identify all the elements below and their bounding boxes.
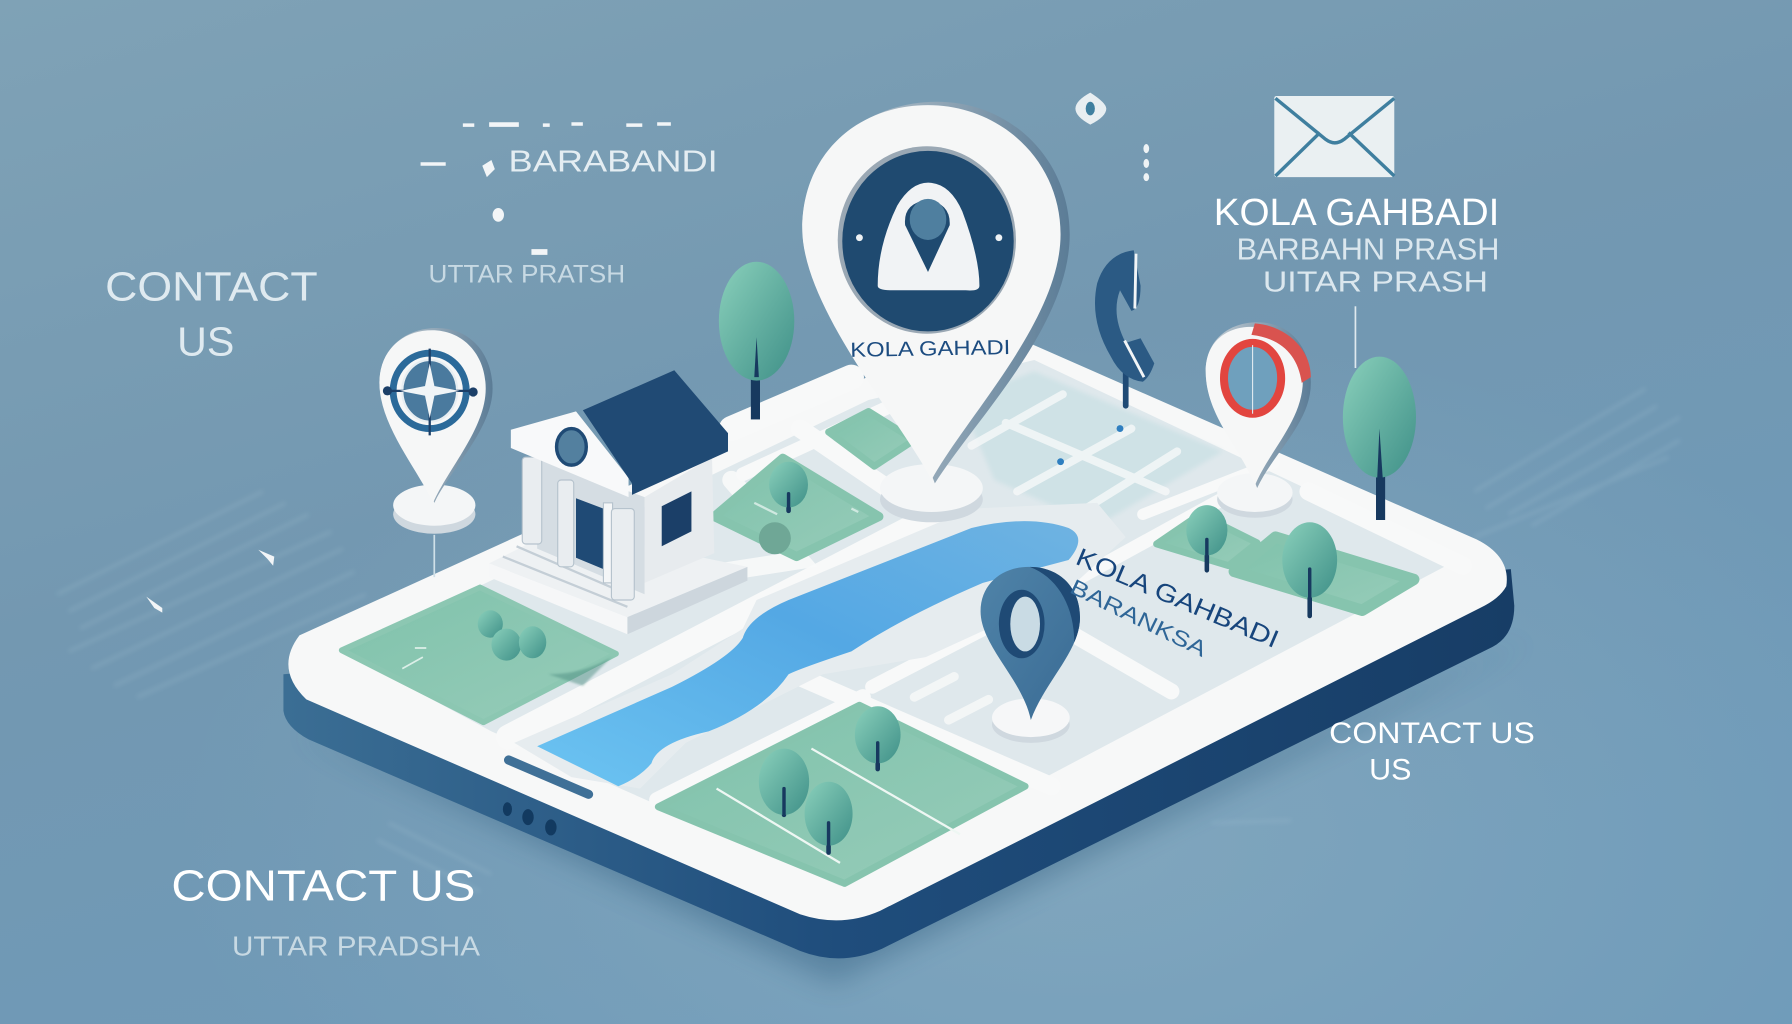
pin label: KOLA GAHADI <box>850 336 1010 362</box>
tablet map device <box>283 325 1514 958</box>
compass icon <box>383 349 478 435</box>
building wall <box>645 457 714 583</box>
text: Uitar Prash: UITAR PRASH <box>1263 266 1488 298</box>
pin base <box>880 464 983 522</box>
text: Barabandi: BARABANDI <box>509 143 718 178</box>
building roof <box>583 370 728 495</box>
river banks <box>514 503 1126 789</box>
small marker icon <box>1075 93 1106 125</box>
building window <box>662 491 691 546</box>
tall tree left <box>719 262 794 419</box>
pin base <box>393 485 475 534</box>
building pediment <box>511 411 629 497</box>
white roads <box>509 377 1463 800</box>
phone icon <box>1095 250 1154 406</box>
red ring <box>1224 343 1281 414</box>
device top surface <box>288 325 1507 920</box>
trees: spheres <box>478 610 546 661</box>
decorative specks top <box>146 122 671 613</box>
envelope icon <box>1274 96 1394 177</box>
text: Contact Us bottom: CONTACT US <box>171 863 475 911</box>
pin bell icon <box>878 183 979 290</box>
text: Barbahn Prash: BARBAHN PRASH <box>1237 231 1499 266</box>
device side buttons <box>503 802 557 835</box>
pin face <box>802 105 1061 480</box>
red location pin <box>1206 306 1355 518</box>
small dots <box>1143 144 1149 181</box>
park: lower left <box>342 587 616 722</box>
text: Uttar Pradesh top: UTTAR PRATSH <box>429 260 625 288</box>
text: Us right: US <box>1369 753 1411 786</box>
upper blue-grey block <box>960 371 1223 526</box>
device base <box>283 569 1514 958</box>
device speaker slot <box>509 760 589 794</box>
map label: Kola Gahbadi Baranksa: KOLA GAHBADI <box>1072 543 1283 654</box>
building base steps <box>489 528 747 634</box>
pin edge <box>802 102 1070 483</box>
park: by building <box>714 458 879 557</box>
device shadow <box>297 640 1531 983</box>
river <box>537 521 1078 786</box>
blue location pin <box>981 567 1080 743</box>
text: Uttar Pradsha bottom: UTTAR PRADSHA <box>232 930 481 961</box>
park: top <box>829 411 914 466</box>
tall tree right <box>1343 357 1416 520</box>
text: Contact Us right: CONTACT US <box>1329 717 1535 750</box>
building round window <box>557 429 586 465</box>
building columns <box>522 457 634 600</box>
building door <box>576 498 603 569</box>
park: right <box>1157 514 1414 610</box>
text: Contact Us left: CONTACT <box>105 264 318 310</box>
trees on map <box>759 462 1337 853</box>
text: Us left: US <box>177 318 234 364</box>
blue dots on map <box>1057 425 1123 465</box>
map label: Kola Gahbadi Baranksa: BARANKSA <box>1066 574 1211 662</box>
text: Kola Gahbadi right: KOLA GAHBADI <box>1214 191 1499 233</box>
big location pin <box>802 102 1070 522</box>
park: bottom <box>658 705 1025 883</box>
pin dark circle <box>838 146 1016 334</box>
building: museum <box>489 370 747 634</box>
map label: Kola Gahbadi Baranksa <box>1066 543 1283 662</box>
compass pin left <box>379 328 493 577</box>
map inner area <box>343 360 1457 886</box>
